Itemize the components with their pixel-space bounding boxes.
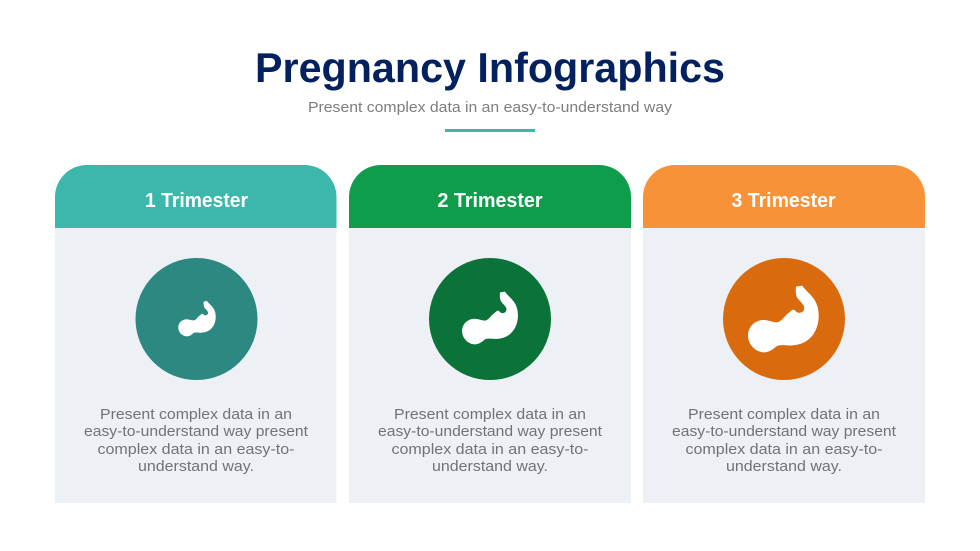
body text (378, 406, 603, 475)
subtitle: Present complex data in an easy-to-understand way (308, 99, 673, 116)
panel header (643, 165, 925, 228)
body text: understand way. (138, 458, 254, 475)
body text: complex data in an easy-to- (392, 441, 589, 458)
heading: 3 Trimester (732, 190, 836, 212)
panel header (55, 165, 336, 228)
body text: easy-to-understand way present (672, 423, 897, 440)
body text (672, 406, 897, 475)
icon: medium stomach-shaped bump in circle (429, 258, 551, 380)
heading: 1 Trimester (145, 190, 248, 212)
panel body (643, 228, 925, 503)
panel: 3 Trimester (643, 165, 925, 503)
body text: Present complex data in an (688, 406, 880, 423)
body text: complex data in an easy-to- (686, 441, 883, 458)
panel: 1 Trimester (55, 165, 336, 503)
panel body (349, 228, 631, 503)
body text (84, 406, 309, 475)
title: Pregnancy Infographics (255, 44, 725, 91)
body text: easy-to-understand way present (378, 423, 603, 440)
body text: Present complex data in an (394, 406, 586, 423)
body text: Present complex data in an (100, 406, 292, 423)
icon: large stomach-shaped bump in circle (723, 258, 845, 380)
body text: easy-to-understand way present (84, 423, 309, 440)
body text: understand way. (432, 458, 548, 475)
body text: understand way. (726, 458, 842, 475)
icon: small stomach-shaped bump in circle (136, 258, 258, 380)
accent underline (445, 129, 535, 132)
heading: 2 Trimester (438, 190, 543, 212)
panel header (349, 165, 631, 228)
panel body (55, 228, 336, 503)
panel: 2 Trimester (349, 165, 631, 503)
body text: complex data in an easy-to- (98, 441, 295, 458)
